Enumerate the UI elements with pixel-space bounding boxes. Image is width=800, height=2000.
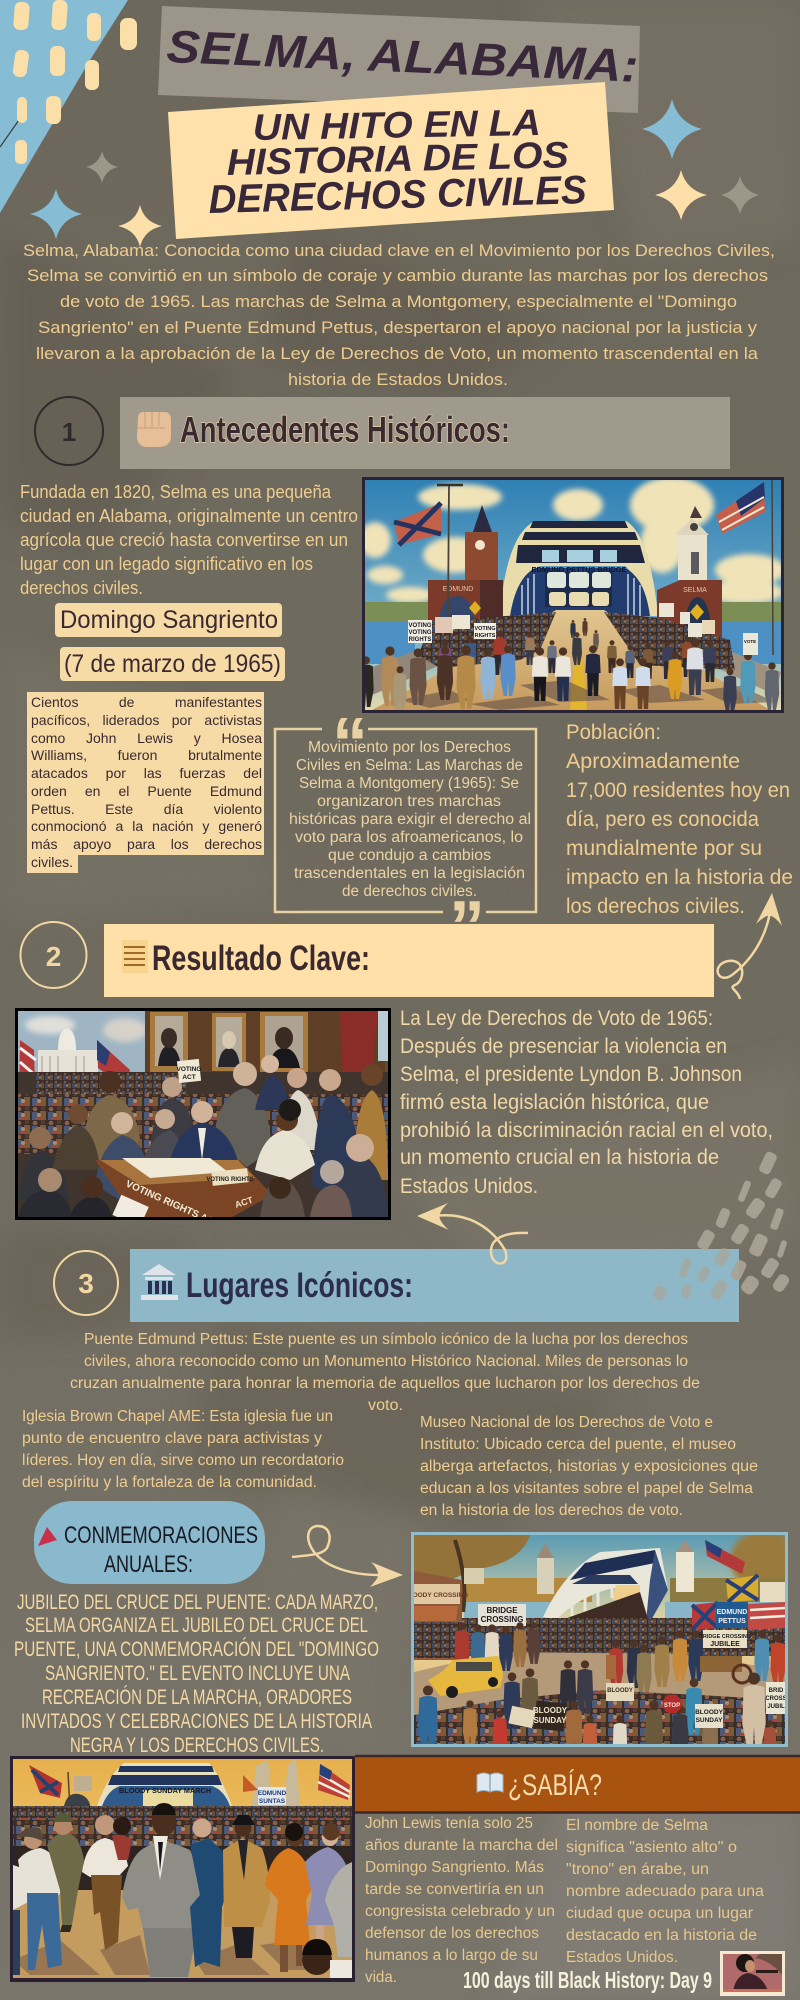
text: Jubileo del Cruce del Puente: INVITADOS Y CELEBRACIONES DE LA HISTORIA — [21, 1710, 372, 1733]
text: Ley de Derechos de Voto: Después de presenciar la violencia en — [400, 1035, 727, 1058]
text: John Lewis: vida. — [365, 1969, 397, 1986]
man tan coat — [223, 1838, 270, 1927]
text: Museo Nacional: Instituto: Ubicado cerca del puente, el museo — [420, 1436, 736, 1453]
text: John Lewis: Domingo Sangriento. Más — [365, 1859, 544, 1876]
text: Domingo Sangriento description: Pettus. Este día violento — [31, 800, 262, 816]
man far left — [18, 1848, 60, 1896]
man with helmet — [47, 1832, 84, 1925]
signs: VOTING — [408, 630, 432, 636]
man gray suit — [122, 1803, 202, 1977]
image: bridge crossing jubilee — [404, 1530, 800, 1763]
heading: Antecedentes Históricos: Antecedentes Históricos: — [180, 409, 510, 450]
section 1 heading panel — [120, 397, 730, 469]
text: Museo Nacional: alberga artefactos, historias y exposiciones que — [420, 1458, 758, 1475]
section 1 number — [35, 397, 103, 465]
capitol — [58, 1028, 76, 1050]
text: Domingo Sangriento description: como John Lewis y Hosea — [31, 730, 262, 746]
text: Domingo Sangriento description: atacados por las fuerzas del — [31, 765, 262, 781]
text: John Lewis: John Lewis tenía solo 25 — [365, 1815, 533, 1832]
text: Iglesia Brown Chapel: Iglesia Brown Chapel AME: Esta iglesia fue un — [22, 1408, 333, 1425]
text: Domingo Sangriento description: orden en el Puente Edmund — [31, 783, 262, 799]
bridge crossing jubilee sign — [703, 1630, 747, 1648]
text: Puente Edmund Pettus: cruzan anualmente para honrar la memoria de aquellos que lucharon por los derechos de — [70, 1375, 700, 1392]
subtitle text — [208, 102, 587, 222]
image: signing of the Voting Rights Act: ACT — [234, 1195, 255, 1210]
decoration: scattered dashes — [651, 1150, 791, 1302]
text background: Domingo Sangriento description — [27, 692, 264, 873]
intro text: historia de Estados Unidos. — [288, 370, 508, 389]
text: población: 17,000 residentes hoy en — [566, 779, 790, 802]
icon: opening quote mark: “ — [332, 704, 368, 784]
text: Ley de Derechos de Voto: La Ley de Derechos de Voto de 1965: — [400, 1007, 713, 1030]
text: Museo Nacional: Museo Nacional de los Derechos de Voto e — [420, 1414, 713, 1431]
image: bridge crossing jubilee: BRIDGE — [486, 1606, 518, 1615]
podium — [606, 1655, 616, 1679]
arrow: back to voting rights image — [417, 1203, 528, 1264]
section 1 number: 1 — [62, 417, 76, 447]
image: Bloody Sunday march with John Lewis: BLOODY SUNDAY MARCH — [119, 1786, 211, 1795]
text: Ley de Derechos de Voto: Estados Unidos. — [400, 1175, 538, 1198]
image: bridge crossing jubilee: EDMUND — [717, 1609, 747, 1616]
quote text: Civiles en Selma: Las Marchas de — [296, 757, 523, 774]
flags — [29, 1765, 62, 1798]
title text: SELMA, ALABAMA: — [166, 20, 639, 92]
intro text: de voto de 1965. Las marchas de Selma a Montgomery, especialmente el "Domingo — [60, 292, 737, 311]
section 2 number — [20, 922, 86, 988]
text: nombre de Selma: Estados Unidos. — [566, 1949, 678, 1966]
image: bridge crossing jubilee: BRIDGE CROSSING — [699, 1634, 751, 1640]
image: bridge crossing jubilee: SUNDAY — [533, 1716, 567, 1725]
image: Bloody Sunday march with John Lewis: EDMUND — [258, 1790, 287, 1797]
text: fundada en 1820: derechos civiles. — [20, 578, 143, 598]
title panel: Selma, Alabama — [158, 6, 640, 113]
intro text: Selma, Alabama: Conocida como una ciudad clave en el Movimiento por los Derechos Civiles, — [23, 241, 775, 260]
foreground crowd — [414, 1690, 785, 1744]
text: nombre de Selma: destacado en la historia de — [566, 1927, 757, 1944]
image: signing of the Voting Rights Act: VOTING RIGHTS ACT — [124, 1179, 221, 1230]
text: Museo Nacional — [420, 1414, 758, 1519]
storefront — [414, 1571, 462, 1660]
image: Bloody Sunday march with John Lewis: SUNTAS — [259, 1798, 286, 1805]
mid crowd — [454, 1622, 786, 1695]
text: Iglesia Brown Chapel: punto de encuentro clave para activistas y — [22, 1430, 322, 1447]
pill: conmemoraciones anuales: CONMEMORACIONES — [64, 1522, 258, 1549]
signs: RIGHTS — [475, 633, 496, 639]
signs and flags — [478, 1604, 526, 1626]
front marchers — [358, 638, 779, 713]
text: población: los derechos civiles. — [566, 895, 745, 918]
pill: conmemoraciones anuales — [34, 1501, 265, 1584]
image: bridge crossing jubilee: BRID — [769, 1688, 784, 1694]
image: bridge crossing jubilee: CROSS — [765, 1696, 787, 1702]
image: bridge crossing jubilee: CROSSING — [481, 1615, 523, 1624]
image: bridge crossing jubilee: BLOODY — [607, 1688, 633, 1694]
text: Jubileo del Cruce del Puente: JUBILEO DEL CRUCE DEL PUENTE: CADA MARZO, — [17, 1591, 378, 1614]
text: fundada en 1820: agrícola que creció hasta convertirse en un — [20, 530, 348, 550]
text: Iglesia Brown Chapel: del espíritu y la fortaleza de la comunidad. — [22, 1474, 317, 1491]
image: signing of the Voting Rights Act: ACT — [182, 1074, 196, 1081]
text: Domingo Sangriento description: Cientos de manifestantes — [31, 694, 262, 710]
image: marchers on Edmund Pettus Bridge — [358, 477, 785, 713]
text: Jubileo del Cruce del Puente: SANGRIENTO." EL EVENTO INCLUYE UNA — [45, 1662, 350, 1685]
text: población: mundialmente por su — [566, 837, 762, 860]
text: población — [566, 721, 793, 918]
text: Domingo Sangriento description: civiles. — [31, 854, 73, 870]
text: Jubileo del Cruce del Puente: RECREACIÓN DE LA MARCHA, ORADORES — [42, 1686, 352, 1709]
wall and portraits — [145, 1011, 385, 1072]
arrow: up to población — [718, 893, 782, 999]
text: Domingo Sangriento description — [31, 694, 262, 870]
section 3 heading panel — [130, 1249, 739, 1322]
signs — [534, 1701, 566, 1731]
left edge man — [13, 1865, 28, 1910]
arrow: to commemoration image — [292, 1526, 403, 1587]
image: bridge crossing jubilee: BLOODY — [533, 1706, 568, 1715]
bridge — [97, 1763, 232, 1806]
man white shirt — [82, 1838, 128, 1877]
subtitle text: UN HITO EN LA — [252, 102, 541, 148]
text: Ley de Derechos de Voto: firmó esta legislación histórica, que — [400, 1091, 709, 1114]
road — [414, 1652, 785, 1715]
icon: classical building — [141, 1264, 178, 1300]
woman in orange — [265, 1848, 314, 1945]
label: date: (7 de marzo de 1965) — [64, 650, 281, 678]
desk — [95, 1160, 272, 1217]
text: Jubileo del Cruce del Puente: SELMA ORGANIZA EL JUBILEO DEL CRUCE DEL — [25, 1614, 368, 1637]
icon: closing quote mark: ” — [449, 887, 485, 967]
text: Ley de Derechos de Voto: Selma, el presidente Lyndon B. Johnson — [400, 1063, 742, 1086]
road — [13, 1890, 352, 1978]
icon: raised fist — [137, 412, 171, 447]
section 3 number — [54, 1251, 118, 1315]
text: población: impacto en la historia de — [566, 866, 793, 889]
text: Iglesia Brown Chapel — [22, 1408, 344, 1491]
text: población: día, pero es conocida — [566, 808, 759, 831]
section 3 number: 3 — [78, 1268, 94, 1299]
text: Domingo Sangriento description: pacíficos, liderados por activistas — [31, 712, 262, 728]
section 2 heading panel — [104, 924, 714, 997]
text: Jubileo del Cruce del Puente — [14, 1591, 379, 1757]
text: John Lewis: años durante la marcha del — [365, 1837, 558, 1854]
crowd background — [18, 1072, 388, 1217]
dense crowd — [418, 612, 556, 668]
text: Jubileo del Cruce del Puente: PUENTE, UNA CONMEMORACIÓN DEL "DOMINGO — [14, 1638, 379, 1661]
text: John Lewis: tarde se convertiría en un — [365, 1881, 544, 1898]
quote text: voto para los afroamericanos, lo — [295, 829, 523, 846]
label: Domingo Sangriento: Domingo Sangriento — [60, 606, 278, 634]
text: Puente Edmund Pettus: Puente Edmund Pettus: Este puente es un símbolo icónico de la lucha por los derechos — [84, 1331, 688, 1348]
text: población: Población: — [566, 721, 661, 744]
text: Domingo Sangriento description: Williams, fueron brutalmente — [31, 747, 262, 763]
bridge — [543, 1548, 668, 1622]
image: bridge crossing jubilee: SUNDAY — [696, 1717, 723, 1724]
icon: scroll — [122, 940, 148, 973]
text: Museo Nacional: educan a los visitantes sobre el papel de Selma — [420, 1480, 753, 1497]
signer — [171, 1122, 238, 1160]
quote text: Selma a Montgomery (1965): Se — [299, 775, 519, 792]
subtitle panel: un hito en la historia — [168, 82, 614, 239]
text: John Lewis: humanos a lo largo de su — [365, 1947, 538, 1964]
text: Jubileo del Cruce del Puente: NEGRA Y LOS DERECHOS CIVILES. — [70, 1734, 324, 1757]
image: marchers on Edmund Pettus Bridge: EDMUND — [443, 586, 473, 593]
text: nombre de Selma: ciudad que ocupa un lugar — [566, 1905, 753, 1922]
section 2 number: 2 — [46, 941, 61, 972]
quote text: de derechos civiles. — [342, 883, 477, 900]
woman behind — [112, 1835, 132, 1860]
image: Bloody Sunday march with John Lewis — [10, 1756, 355, 1982]
crowd band — [462, 1618, 785, 1656]
lamp post and flags — [394, 480, 773, 655]
intro text: llevaron a la aprobación de la Ley de Derechos de Voto, un momento trascendental en la — [36, 344, 759, 363]
text: nombre de Selma: "trono" en árabe, un — [566, 1861, 709, 1878]
text: Ley de Derechos de Voto — [400, 1007, 773, 1198]
yellow car — [428, 1656, 503, 1696]
text: John Lewis: congresista celebrado y un — [365, 1903, 555, 1920]
decoration: sparkle stars — [30, 99, 759, 247]
quote text: históricas para exigir el derecho al — [289, 811, 531, 828]
text: población: Aproximadamente — [566, 750, 740, 773]
decoration: blue stripe with cream dashes — [0, 0, 137, 213]
road and parapets — [372, 610, 770, 710]
intro text: Sangriento" en el Puente Edmund Pettus, despertaron el apoyo nacional por la justicia y — [38, 318, 758, 337]
icon: open book — [477, 1773, 503, 1792]
image: bridge crossing jubilee: JUBILEE — [710, 1641, 740, 1648]
quote text — [289, 739, 531, 900]
image: bridge crossing jubilee: JUBIL — [767, 1704, 785, 1710]
text: John Lewis — [365, 1815, 558, 1986]
image: signing of the Voting Rights Act — [15, 1008, 391, 1230]
people — [85, 1095, 140, 1160]
text: Ley de Derechos de Voto: prohibió la discriminación racial en el voto, — [400, 1119, 773, 1142]
text: Ley de Derechos de Voto: un momento crucial en la historia de — [400, 1146, 719, 1169]
image: bridge crossing jubilee: PETTUS — [718, 1618, 746, 1625]
cart — [700, 1656, 742, 1672]
text: Puente Edmund Pettus: civiles, ahora reconocido como un Monumento Histórico Nacional. Miles de personas lo — [84, 1353, 688, 1370]
text: Museo Nacional: en la historia de los derechos de voto. — [420, 1502, 683, 1519]
intro text — [23, 241, 775, 389]
woman in white — [255, 1130, 315, 1180]
signs: RIGHTS — [409, 637, 431, 643]
text: Iglesia Brown Chapel: líderes. Hoy en día, sirve como un recordatorio — [22, 1452, 344, 1469]
avatar: portrait thumbnail — [720, 1951, 785, 1996]
signs: VOTING — [408, 623, 432, 629]
image: marchers on Edmund Pettus Bridge: SELMA — [683, 587, 707, 594]
man blue suit — [190, 1838, 232, 1967]
heading: Resultado Clave: Resultado Clave: — [152, 939, 370, 978]
text: Domingo Sangriento description: conmocionó a la nación y generó — [31, 818, 262, 834]
image: bridge crossing jubilee: BLOODY CROSSING — [404, 1592, 468, 1599]
image: marchers on Edmund Pettus Bridge: EDMUND PETTUS BRIDGE — [532, 565, 626, 574]
woman in lavender — [305, 1847, 348, 1925]
image: bridge crossing jubilee: BLOODY — [695, 1709, 724, 1716]
text: nombre de Selma — [566, 1817, 764, 1966]
subtitle text: HISTORIA DE LOS — [226, 134, 569, 183]
text: nombre de Selma: significa "asiento alto" o — [566, 1839, 737, 1856]
image: signing of the Voting Rights Act: VOTING RIGHTS — [206, 1177, 254, 1183]
quote text: trascendentales en la legislación — [294, 865, 525, 882]
text: fundada en 1820: Fundada en 1820, Selma es una pequeña — [20, 482, 332, 502]
text: nombre de Selma: nombre adecuado para una — [566, 1883, 764, 1900]
text: Puente Edmund Pettus: voto. — [368, 1397, 403, 1414]
right edge man and child — [325, 1862, 352, 1957]
quote text: Movimiento por los Derechos — [308, 739, 511, 756]
text: Puente Edmund Pettus — [70, 1331, 700, 1414]
heading: Lugares Icónicos: Lugares Icónicos: — [186, 1266, 413, 1305]
text: nombre de Selma: El nombre de Selma — [566, 1817, 708, 1834]
buildings — [428, 580, 480, 622]
signs: VOTE — [744, 639, 756, 644]
long shadows — [400, 680, 775, 710]
signs — [408, 601, 758, 655]
banner: ¿Sabía?: ¿SABÍA? — [508, 1769, 602, 1802]
text: fundada en 1820 — [20, 482, 358, 598]
flags — [97, 1040, 130, 1072]
image: signing of the Voting Rights Act: VOTING — [177, 1066, 201, 1073]
image: bridge crossing jubilee: STOP — [664, 1703, 680, 1709]
text: Domingo Sangriento description: más apoyo para los derechos — [31, 836, 262, 852]
quote frame: Movimiento por los Derechos Civiles — [275, 704, 536, 967]
bridge arch — [500, 521, 658, 616]
text: fundada en 1820: lugar con un legado significativo en los — [20, 554, 313, 574]
quote text: organizaron tres marchas — [317, 793, 501, 810]
quote text: que condujo a cambios — [328, 847, 491, 864]
signs: VOTING — [474, 626, 496, 632]
text: fundada en 1820: ciudad en Alabama, originalmente un centro — [20, 506, 358, 526]
subtitle text: DERECHOS CIVILES — [208, 168, 587, 222]
intro text: Selma se convirtió en un símbolo de coraje y cambio durante las marchas por los derechos — [27, 266, 768, 285]
icon: party popper — [38, 1527, 57, 1546]
front people — [260, 1182, 305, 1217]
banner: ¿Sabía? — [355, 1755, 800, 1813]
crowd band — [13, 1806, 352, 1818]
text: John Lewis: defensor de los derechos — [365, 1925, 539, 1942]
pill: conmemoraciones anuales: ANUALES: — [104, 1551, 193, 1578]
